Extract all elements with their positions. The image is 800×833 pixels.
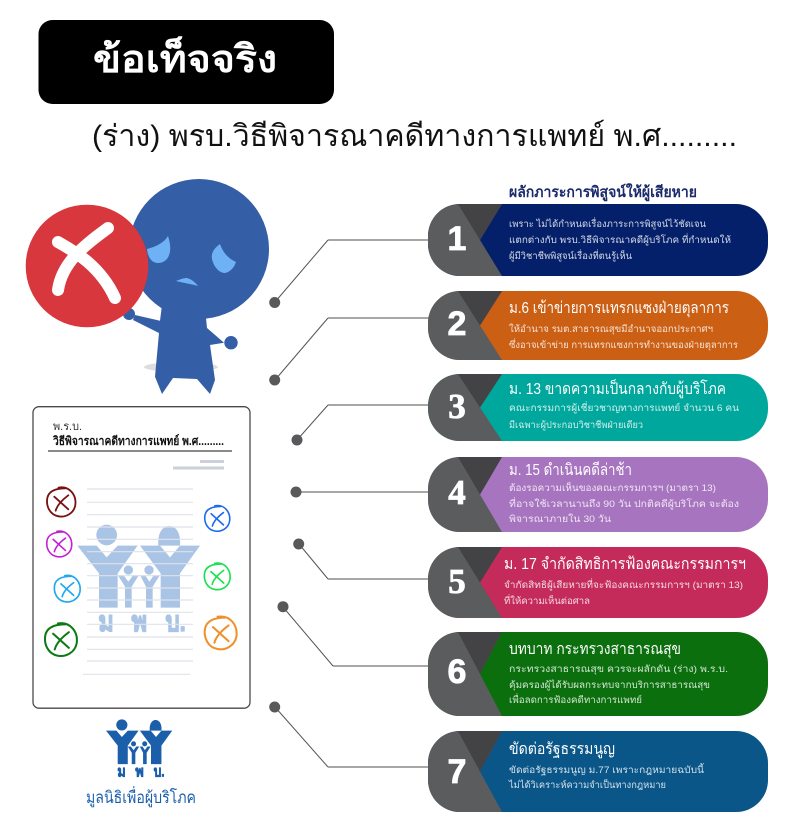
item 1: แตกต่างกับ พรบ.วิธีพิจารณาคดีผู้บริโภค ที่กำหนดให้ [509, 233, 731, 246]
item 4: 4 [448, 473, 466, 512]
hands [123, 308, 238, 349]
document panel [33, 407, 250, 708]
document title: วิธีพิจารณาคดีทางการแพทย์ พ.ศ......... [53, 434, 224, 448]
item 3 [428, 374, 768, 441]
title box [38, 20, 334, 104]
shadow [144, 362, 218, 372]
item 4 [428, 457, 768, 532]
item 6: เพื่อลดการฟ้องคดีทางการแพทย์ [509, 693, 642, 706]
head [129, 179, 269, 319]
item 4: พิจารณาภายใน 30 วัน [509, 513, 612, 525]
item 3: ม. 13 ขาดความเป็นกลางกับผู้บริโภค [509, 378, 726, 399]
item 4: ต้องรอความเห็นของคณะกรรมการฯ (มาตรา 13) [509, 481, 716, 494]
foundation name: มูลนิธิเพื่อผู้บริโภค [86, 786, 196, 808]
item 7: ไม่ได้วิเคราะห์ความจำเป็นทางกฎหมาย [508, 778, 666, 791]
red sign [26, 205, 148, 327]
item 7 [428, 731, 768, 812]
item 3: คณะกรรมการผู้เชี่ยวชาญทางการแพทย์ จำนวน 6 คน [509, 401, 740, 414]
item 1: เพราะ ไม่ได้กำหนดเรื่องภาระการพิสูจน์ไว้ชัดเจน [509, 217, 707, 230]
body [133, 305, 224, 394]
item 2: ซึ่งอาจเข้าข่าย การแทรกแซงการทำงานของฝ่ายตุลาการ [509, 338, 738, 351]
item 6 [428, 632, 768, 716]
foundation logo [86, 719, 196, 808]
item 6: คุ้มครองผู้ได้รับผลกระทบจากบริการสาธารณสุข [509, 679, 710, 691]
item 7: ขัดต่อรัฐธรรมนูญ ม.77 เพราะกฎหมายฉบับนี้ [509, 763, 705, 776]
eyes and mouth [147, 236, 236, 286]
item 6: 6 [448, 653, 466, 691]
watermark logo: ม [98, 606, 114, 637]
item 6: บทบาท กระทรวงสาธารณสุข [509, 641, 681, 659]
white X [58, 228, 115, 298]
item 5: ม. 17 จำกัดสิทธิการฟ้องคณะกรรมการฯ [504, 555, 746, 573]
watermark logo [77, 525, 200, 637]
connector lines [269, 240, 438, 767]
item 7: ขัดต่อรัฐธรรมนูญ [509, 741, 615, 759]
item 5: 5 [448, 562, 466, 601]
item 5 [428, 547, 768, 618]
heading above item 1: ผลักภาระการพิสูจน์ให้ผู้เสียหาย [509, 183, 697, 202]
document small heading: พ.ร.บ. [53, 421, 82, 433]
item 3: มีเฉพาะผู้ประกอบวิชาชีพฝ่ายเดียว [509, 419, 643, 431]
item 2: 2 [448, 305, 466, 343]
character holding red X sign [26, 179, 269, 394]
item 2: ม.6 เข้าข่ายการแทรกแซงฝ่ายตุลาการ [509, 299, 729, 318]
item 2 [428, 291, 768, 360]
item 4: ม. 15 ดำเนินคดีล่าช้า [509, 461, 632, 479]
item 3: 3 [448, 387, 466, 426]
watermark logo: บ. [166, 606, 186, 637]
foundation logo: บ. [154, 764, 165, 781]
subtitle: (ร่าง) พรบ.วิธีพิจารณาคดีทางการแพทย์ พ.ศ......... [92, 119, 737, 153]
item 7: 7 [448, 753, 466, 791]
hand-drawn X icons [45, 487, 237, 656]
item 4: ที่อาจใช้เวลานานถึง 90 วัน ปกติคดีผู้บริโภค จะต้อง [509, 497, 739, 510]
item 6: กระทรวงสาธารณสุข ควรจะผลักดัน (ร่าง) พ.ร.บ. [509, 664, 728, 675]
foundation logo: ม [117, 764, 126, 781]
item 1: 1 [448, 220, 466, 258]
item 5: จำกัดสิทธิผู้เสียหายที่จะฟ้องคณะกรรมการฯ (มาตรา 13) [504, 578, 743, 591]
item 1: ผู้มีวิชาชีพพิสูจน์เรื่องที่ตนรู้เห็น [509, 249, 632, 262]
foundation logo: พ [135, 764, 144, 781]
item 1 [428, 204, 768, 276]
watermark logo: พ [132, 606, 147, 637]
item 2: ให้อำนาจ รมต.สาธารณสุขมีอำนาจออกประกาศฯ [509, 323, 713, 335]
item 5: ที่ให้ความเห็นต่อศาล [504, 594, 590, 607]
title text: ข้อเท็จจริง [93, 36, 277, 81]
